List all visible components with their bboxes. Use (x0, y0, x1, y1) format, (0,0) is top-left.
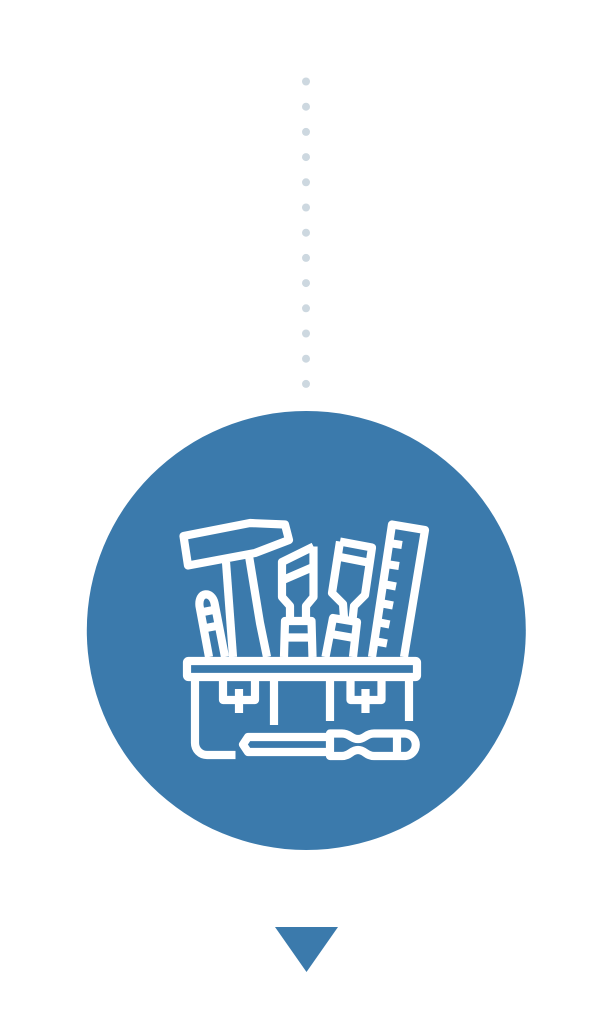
blue circle background (87, 411, 526, 850)
icon: toolbox with tools (184, 523, 425, 756)
icon: toolbox lid (187, 661, 417, 677)
icon: ruler (372, 524, 425, 657)
icon: toolbox latches (223, 680, 382, 713)
icon: pencil (199, 594, 225, 657)
icon: flat chisel (282, 546, 314, 657)
arrow: down triangle (275, 927, 338, 972)
icon: wide chisel (326, 542, 372, 657)
icon: hammer (184, 523, 289, 657)
dotted vertical connector (302, 78, 310, 388)
icon: screwdriver (243, 734, 416, 756)
icon: toolbox body (195, 680, 409, 755)
